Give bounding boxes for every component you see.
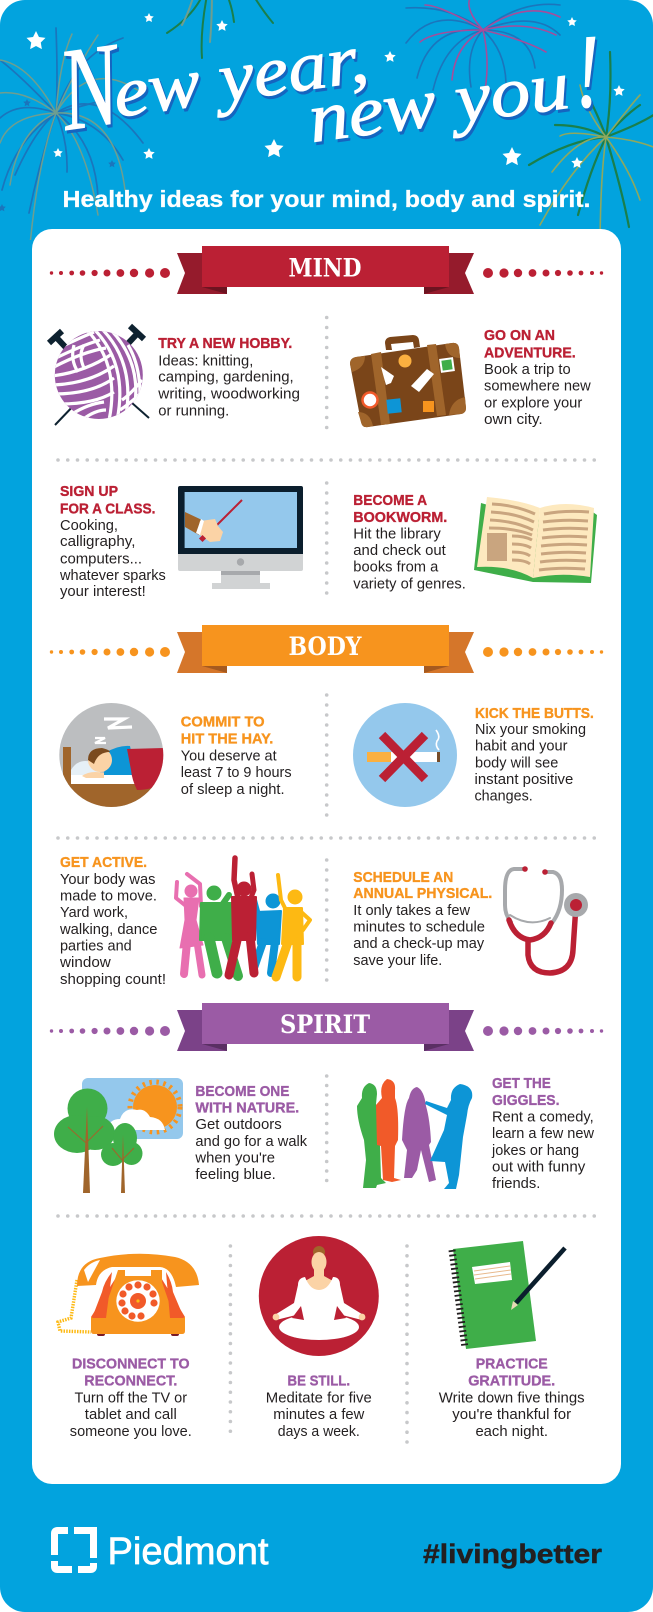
text: commit to hit the hay [181,714,292,798]
text: kick the butts: habit and your [475,738,568,755]
white content card [32,229,621,1484]
text: kick the butts: instant positive [474,771,573,788]
title: N [53,20,134,159]
text: go on an adventure: GO ON AN [484,327,555,344]
text: become a bookworm: books from a [353,559,439,576]
text: get the giggles: friends. [492,1175,540,1192]
text: sign up for a class: SIGN UP [60,483,118,500]
text: get the giggles: learn a few new [492,1125,594,1142]
text: get the giggles: GIGGLES. [492,1092,560,1109]
text: get the giggles: out with funny [492,1159,586,1176]
text: be still: Meditate for five [266,1390,372,1407]
ribbon: spirit [177,1003,474,1051]
icon: Piedmont bracket mark [54,1530,94,1570]
icon: rotary telephone [58,1254,199,1336]
text: sign up for a class: FOR A CLASS. [60,500,155,517]
text: get active: walking, dance [59,921,158,938]
title: new you [304,47,574,158]
text: be still: BE STILL. [288,1373,350,1390]
title: ew year, [108,20,373,133]
firework: top right [406,0,560,90]
text: get the giggles [491,1075,594,1192]
text: go on an adventure: somewhere new [484,377,591,394]
text: go on an adventure: ADVENTURE. [484,344,576,361]
icon: laughing friends silhouettes [357,1079,472,1189]
text: go on an adventure: Book a trip to [484,361,571,378]
text: go on an adventure: own city. [484,411,543,428]
panel: spirit section [50,1003,603,1442]
text: disconnect to reconnect: someone you love. [70,1423,192,1440]
text: kick the butts: Nix your smoking [475,721,586,738]
title: new you [306,50,576,161]
icon: computer with pointer [178,486,303,589]
text: be still: minutes a few [273,1406,364,1423]
text: practice gratitude: you're thankful for [452,1406,571,1423]
ribbon: spirit: SPIRIT [280,1010,370,1039]
text: disconnect to reconnect: RECONNECT. [84,1373,177,1390]
text: try a new hobby: camping, gardening, [158,369,294,386]
text: try a new hobby: TRY A NEW HOBBY. [158,335,292,352]
text: practice gratitude: PRACTICE [476,1356,548,1373]
text: disconnect to reconnect: DISCONNECT TO [72,1356,190,1373]
text: try a new hobby: writing, woodworking [157,386,300,403]
text: schedule an annual physical: and a check-up may [353,935,485,952]
title: N [51,17,132,156]
text: get active: parties and [60,938,132,955]
text: kick the butts: body will see [475,755,558,772]
fireworks [0,0,653,240]
ribbon: mind [177,246,474,294]
title: ew year, [110,23,375,136]
text: become one with nature: BECOME ONE [195,1083,289,1100]
text: try a new hobby: or running. [158,402,229,419]
panel: mind section [49,246,603,603]
text: schedule an annual physical: minutes to schedule [353,919,485,936]
icon: notebook and pen [452,1241,565,1349]
text: get active: shopping count! [60,971,166,988]
text: disconnect to reconnect: Turn off the TV or [75,1390,187,1407]
text: sign up for a class: computers... [60,550,142,567]
text: become a bookworm: variety of genres. [353,575,466,592]
text: schedule an annual physical: It only takes a few [353,902,470,919]
text: become one with nature: Get outdoors [195,1116,282,1133]
text: become one with nature: feeling blue. [195,1166,276,1183]
dotted trail: mind [50,268,603,278]
ribbon: body [177,625,474,673]
text: schedule an annual physical [353,869,492,969]
text: get active: Yard work, [60,904,128,921]
text: practice gratitude [439,1356,585,1440]
text: become one with nature [194,1083,308,1183]
text: kick the butts: changes. [474,788,533,805]
firework: top centre [167,0,273,58]
stars [0,13,625,211]
text: disconnect to reconnect [70,1356,192,1440]
icon: no smoking [353,703,457,807]
text: sign up for a class: Cooking, [60,517,118,534]
text: go on an adventure [484,327,591,428]
icon: dancing silhouettes [176,858,310,977]
dotted trail: spirit [50,1026,603,1036]
text: commit to hit the hay: least 7 to 9 hours [181,764,292,781]
text: get the giggles: Rent a comedy, [492,1109,594,1126]
text: schedule an annual physical: save your life. [353,952,442,969]
text: get the giggles: jokes or hang [491,1142,579,1159]
text: commit to hit the hay: COMMIT TO [181,714,265,731]
title: ! [571,12,603,130]
text: kick the butts [474,705,594,805]
text: practice gratitude: each night. [475,1423,548,1440]
text: get active: made to move. [60,888,157,905]
text: sign up for a class [59,483,166,600]
text: commit to hit the hay: of sleep a night. [181,781,285,798]
text: become a bookworm: BOOKWORM. [353,509,447,526]
ribbon: body: BODY [288,632,363,661]
icon: stethoscope [505,866,588,973]
text: sign up for a class: your interest! [60,583,146,600]
text: be still: days a week. [278,1423,360,1440]
text: practice gratitude: Write down five things [439,1390,585,1407]
text: kick the butts: KICK THE BUTTS. [475,705,594,722]
text: disconnect to reconnect: tablet and call [85,1406,177,1423]
text: be still [266,1373,372,1440]
text: get the giggles: GET THE [492,1075,551,1092]
text: sign up for a class: calligraphy, [60,533,135,550]
text: become a bookworm: and check out [353,542,447,559]
text: go on an adventure: or explore your [484,394,582,411]
text: try a new hobby: Ideas: knitting, [158,352,253,369]
text: get active [59,854,166,988]
text: practice gratitude: GRATITUDE. [468,1373,555,1390]
text: become one with nature: WITH NATURE. [195,1099,299,1116]
subtitle: Healthy ideas for your mind, body and spirit. [62,186,590,212]
text: become one with nature: when you're [194,1149,275,1166]
icon: open book [474,497,597,583]
icon: yarn ball with needles [49,326,149,425]
ribbon: mind: MIND [288,254,362,282]
text: get active: window [59,954,111,971]
dotted trail: body [50,647,603,657]
icon: meditating woman [259,1236,379,1356]
text: schedule an annual physical: SCHEDULE AN [353,869,453,886]
text: become one with nature: and go for a walk [195,1133,308,1150]
text: become a bookworm [353,492,466,592]
title [51,12,605,161]
text: get active: Your body was [60,871,155,888]
text: become a bookworm: BECOME A [353,492,427,509]
text: become a bookworm: Hit the library [353,525,441,542]
icon: suitcase [350,335,466,427]
text: commit to hit the hay: HIT THE HAY. [181,731,273,748]
text: get active: GET ACTIVE. [60,854,147,871]
firework: left [0,27,144,240]
text: sign up for a class: whatever sparks [59,567,166,584]
text: try a new hobby [157,335,300,419]
panel: body section [50,625,603,988]
hashtag: #livingbetter [423,1539,603,1569]
icon: sleeping person [59,703,164,807]
text: schedule an annual physical: ANNUAL PHYSICAL. [353,885,492,902]
firework: right [528,50,653,229]
logo: Piedmont: Piedmont [108,1531,269,1573]
text: commit to hit the hay: You deserve at [181,748,277,765]
icon: trees and sun [54,1078,183,1193]
title: ! [573,15,605,133]
